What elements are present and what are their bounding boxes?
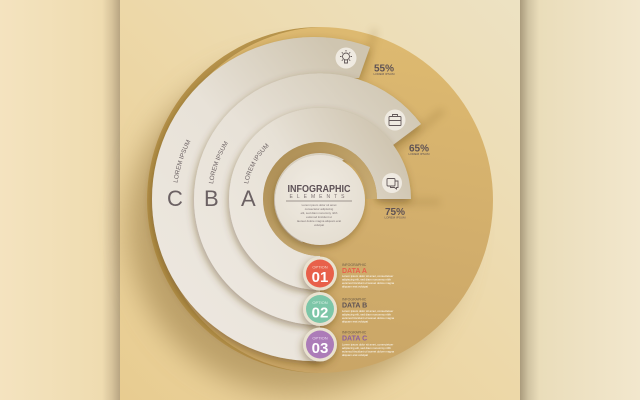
ring letters: C [167, 186, 183, 211]
center paragraph: volutpat [314, 223, 324, 227]
center panel [120, 0, 520, 400]
ring A segment [229, 108, 411, 290]
center paragraph: consectetur adipiscing [305, 207, 334, 211]
icon: light bulb [336, 48, 356, 68]
center paragraph: elit, sed diam nonummy nibh [301, 211, 338, 215]
center disc [275, 155, 365, 245]
ring letters: A [241, 186, 256, 211]
center hole ring [263, 142, 377, 256]
center paragraph: laoreet dolore magna aliquam erat [297, 219, 341, 223]
data A text: DATA A [342, 268, 367, 275]
large gold circle [147, 27, 493, 373]
data A text: aliquam erat volutpat [342, 284, 368, 288]
title: INFOGRAPHIC [288, 183, 351, 195]
shadow of large circle [128, 58, 464, 394]
data B text: adipiscing elit, sed diam nonummy nibh [342, 312, 391, 316]
data A text [342, 263, 395, 288]
stat: 75%: 75% [385, 207, 405, 218]
stat: 55%: 55% [374, 64, 394, 74]
center paragraph [297, 203, 341, 227]
center paragraph: Lorem ipsum dolor sit amet [302, 203, 337, 207]
option 02 badge: OPTION [312, 300, 328, 305]
data C text: euismod tincidunt ut laoreet dolore magna [342, 350, 395, 354]
stat: 75%: LOREM IPSUM [384, 216, 406, 220]
stat: 55%: LOREM IPSUM [373, 72, 395, 76]
data B text: Lorem ipsum dolor sit amet, consectetuer [342, 309, 393, 313]
data C text [342, 330, 395, 357]
data C text: DATA C [342, 336, 367, 342]
data C text: adipiscing elit, sed diam nonummy nibh [342, 346, 391, 350]
data C text: aliquam erat volutpat [342, 353, 368, 357]
stat: 65%: LOREM IPSUM [408, 152, 430, 156]
icon: speech bubbles [382, 173, 402, 193]
option 02 badge: 02 [312, 304, 328, 322]
option 03 badge [303, 328, 337, 362]
wedge shadows [358, 28, 446, 205]
stat: 65%: 65% [409, 144, 429, 154]
curved ring labels: LOREM IPSUM [173, 140, 190, 182]
curved ring labels: LOREM IPSUM [244, 143, 269, 184]
center paragraph: euismod tincidunt ut [306, 215, 332, 219]
data B text: DATA B [342, 302, 367, 310]
data C text: Lorem ipsum dolor sit amet, consectetuer [342, 342, 393, 346]
data B text [342, 298, 395, 324]
subtitle: ELEMENTS [290, 194, 348, 200]
option 02 badge [303, 292, 337, 326]
data A text: Lorem ipsum dolor sit amet, consectetuer [342, 274, 393, 278]
curved ring labels: LOREM IPSUM [208, 141, 228, 184]
data A text: euismod tincidunt ut laoreet dolore magna [342, 281, 395, 285]
dark crescent on left [147, 27, 320, 373]
data B text: aliquam erat volutpat [342, 320, 368, 324]
ring letters [167, 186, 256, 211]
data B text: euismod tincidunt ut laoreet dolore magna [342, 316, 395, 320]
data B text: INFOGRAPHIC [342, 298, 367, 302]
option 01 badge: 01 [312, 269, 328, 286]
divider [286, 200, 352, 202]
curved ring labels [173, 140, 269, 184]
data A text: INFOGRAPHIC [342, 263, 367, 267]
ring letters: B [204, 186, 219, 211]
ring B segment [194, 73, 421, 325]
option 03 badge: OPTION [312, 336, 328, 340]
option 01 badge [303, 256, 337, 290]
option 01 badge: OPTION [312, 264, 328, 270]
data C text: INFOGRAPHIC [342, 330, 367, 334]
ring C segment [152, 37, 370, 361]
option 03 badge: 03 [312, 340, 328, 357]
data A text: adipiscing elit, sed diam nonummy nibh [342, 278, 391, 282]
icon: briefcase [384, 110, 406, 130]
